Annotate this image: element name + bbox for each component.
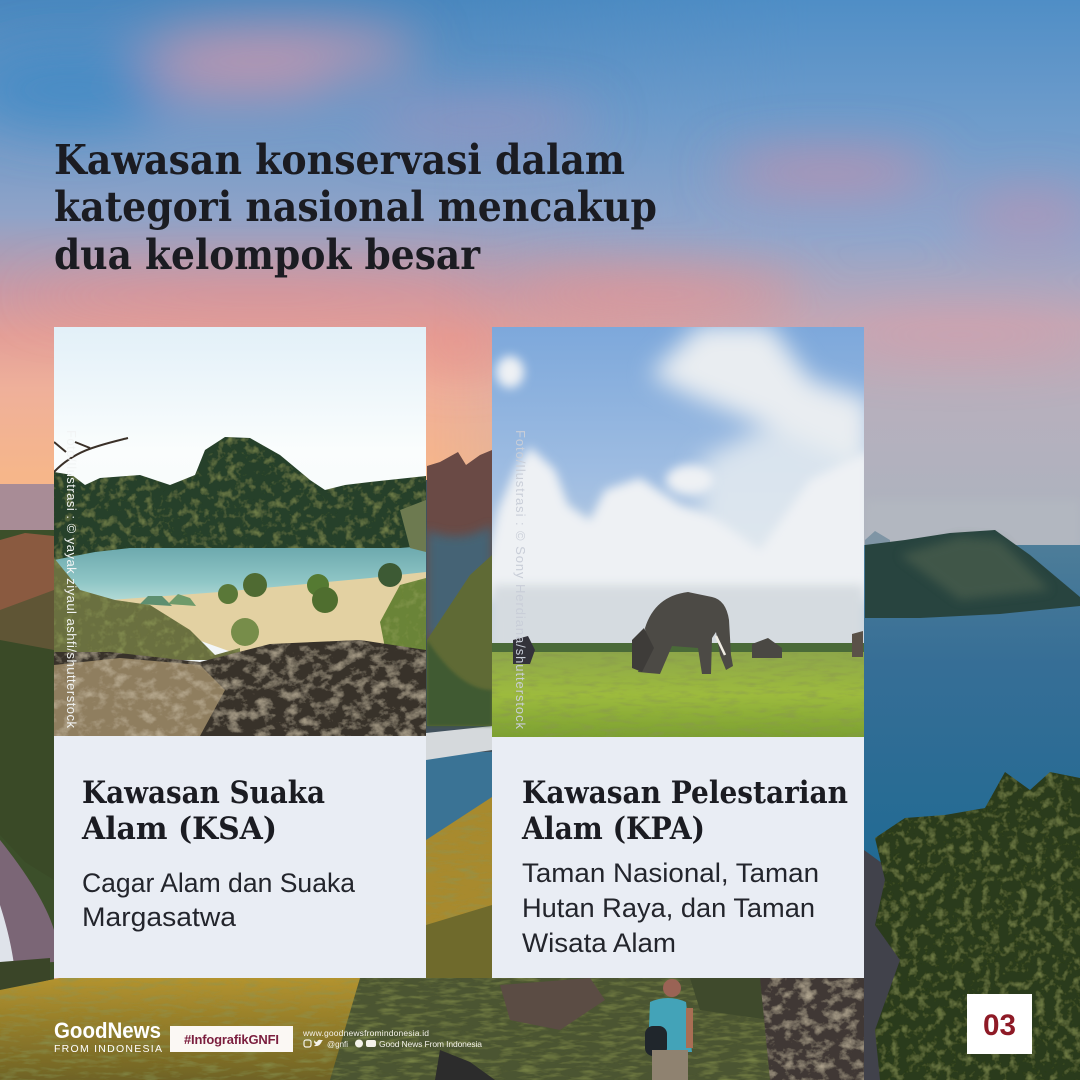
caption card: Kawasan Pelestarian — [522, 775, 848, 811]
caption card: Alam (KPA) — [521, 811, 705, 847]
caption card — [54, 736, 426, 978]
hashtag badge: #InfografikGNFI — [184, 1032, 279, 1047]
caption card: Cagar Alam dan Suaka — [82, 868, 356, 898]
social links: Good News From Indonesia — [379, 1039, 482, 1049]
caption card: Alam (KSA) — [81, 811, 277, 847]
photo: lagoon and rocky coast — [54, 327, 426, 736]
photo credit: Foto/Ilustrasi : © Sony Herdiana/shutterstock — [513, 430, 528, 730]
title — [54, 136, 657, 279]
title: Kawasan konservasi dalam — [54, 136, 625, 184]
caption card: Margasatwa — [82, 902, 237, 932]
social links: www.goodnewsfromindonesia.id — [302, 1028, 429, 1038]
icon: tree foliage bottom right — [875, 772, 1080, 1080]
page number: 03 — [983, 1009, 1016, 1042]
caption card: Taman Nasional, Taman — [522, 858, 819, 888]
caption card: Wisata Alam — [522, 928, 676, 958]
panel: Kawasan Suaka Alam — [54, 327, 426, 978]
social links: @gnfi — [327, 1040, 348, 1049]
caption card — [492, 737, 864, 978]
title: kategori nasional mencakup — [54, 183, 657, 231]
photo: elephants on a green field — [480, 325, 870, 737]
logo: GoodNews from Indonesia — [54, 1018, 162, 1055]
caption card: Hutan Raya, dan Taman — [522, 893, 815, 923]
title: dua kelompok besar — [54, 231, 481, 279]
icon: main elephant — [513, 592, 863, 674]
icon: hiker figure — [645, 979, 693, 1080]
hashtag badge — [170, 1026, 293, 1052]
page number — [967, 994, 1032, 1054]
caption card: Kawasan Suaka — [82, 775, 325, 811]
panel: Kawasan Pelestarian Alam — [480, 325, 870, 978]
photo credit: Foto/Ilustrasi : © yayak ziyaul ashfi/shutterstock — [64, 430, 79, 728]
social links — [302, 1028, 482, 1049]
logo: GoodNews from Indonesia: FROM INDONESIA — [54, 1043, 162, 1055]
logo: GoodNews from Indonesia: GoodNews — [54, 1018, 161, 1043]
